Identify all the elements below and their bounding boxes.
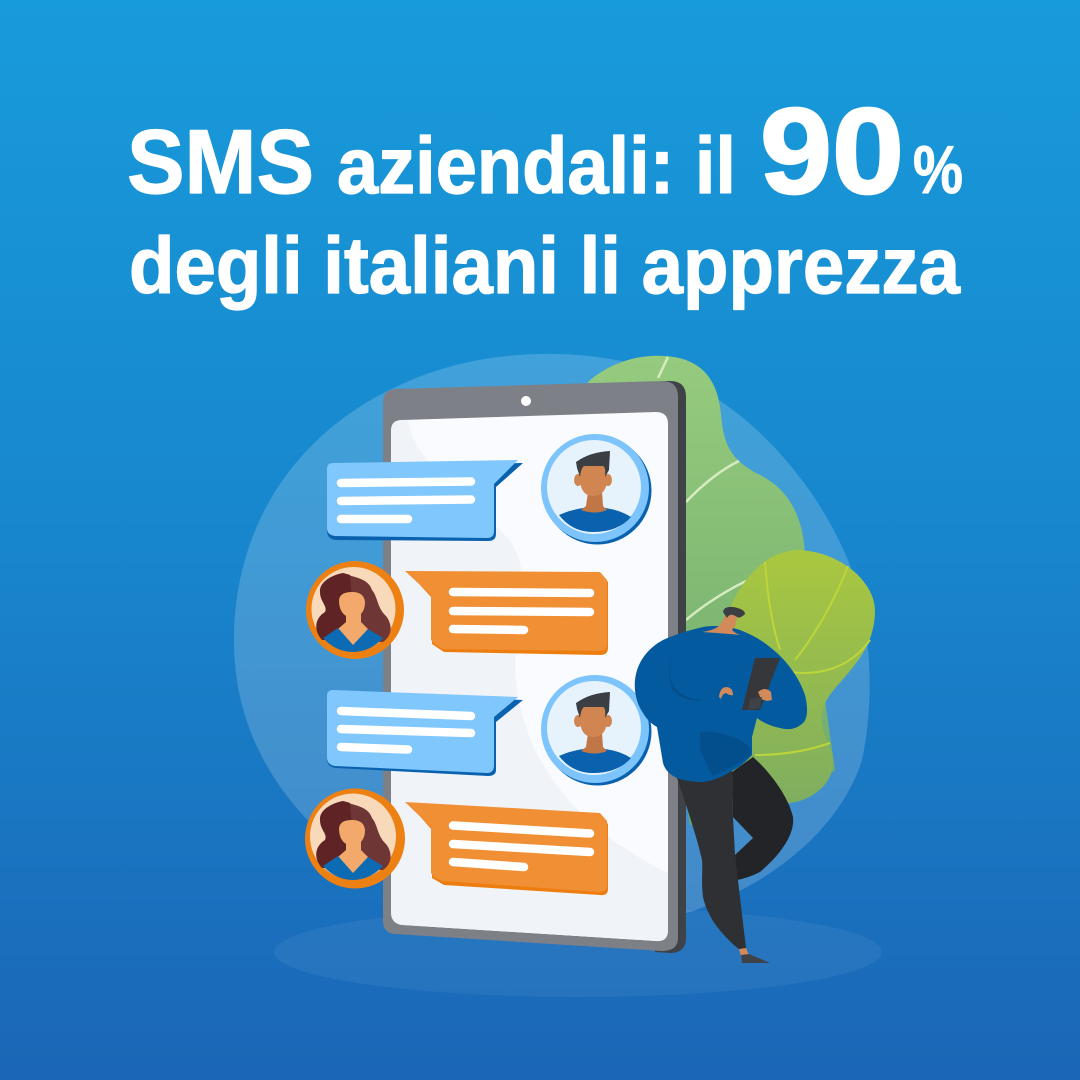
avatar: man 1 [541, 434, 652, 544]
hands and tablet [719, 658, 780, 710]
avatar: woman 1 [306, 561, 404, 659]
chat bubble: orange 2 [405, 802, 608, 895]
title [127, 83, 963, 310]
title line 1 [127, 83, 963, 219]
title line 1: SMS [127, 112, 314, 213]
green leaf [588, 356, 835, 825]
chat bubble: blue 2 [327, 690, 523, 776]
phone [383, 381, 686, 953]
sweater [635, 626, 807, 782]
avatar: man 2 [541, 675, 652, 786]
person [635, 607, 807, 963]
sweater folds [669, 657, 751, 776]
camera dot [521, 396, 531, 406]
phone body [383, 381, 678, 951]
phone dark side [655, 381, 686, 953]
chat bubble: orange 1 [405, 571, 608, 655]
title line 1: % [913, 132, 963, 208]
foot [741, 954, 770, 963]
title line 1: aziendali: il [337, 121, 736, 210]
title line 2: degli italiani li apprezza [129, 221, 960, 310]
background blob [234, 354, 870, 922]
neck and head [702, 607, 745, 635]
back leg [732, 757, 793, 880]
ankle [739, 948, 749, 956]
ground shadow [274, 907, 882, 997]
avatar: woman 2 [305, 788, 405, 888]
chat bubble: blue 1 [327, 460, 523, 541]
yellow leaf [728, 550, 875, 803]
screen shading [391, 420, 668, 941]
front leg [677, 770, 746, 950]
phone screen [391, 412, 668, 941]
title line 1: 90 [760, 83, 904, 219]
